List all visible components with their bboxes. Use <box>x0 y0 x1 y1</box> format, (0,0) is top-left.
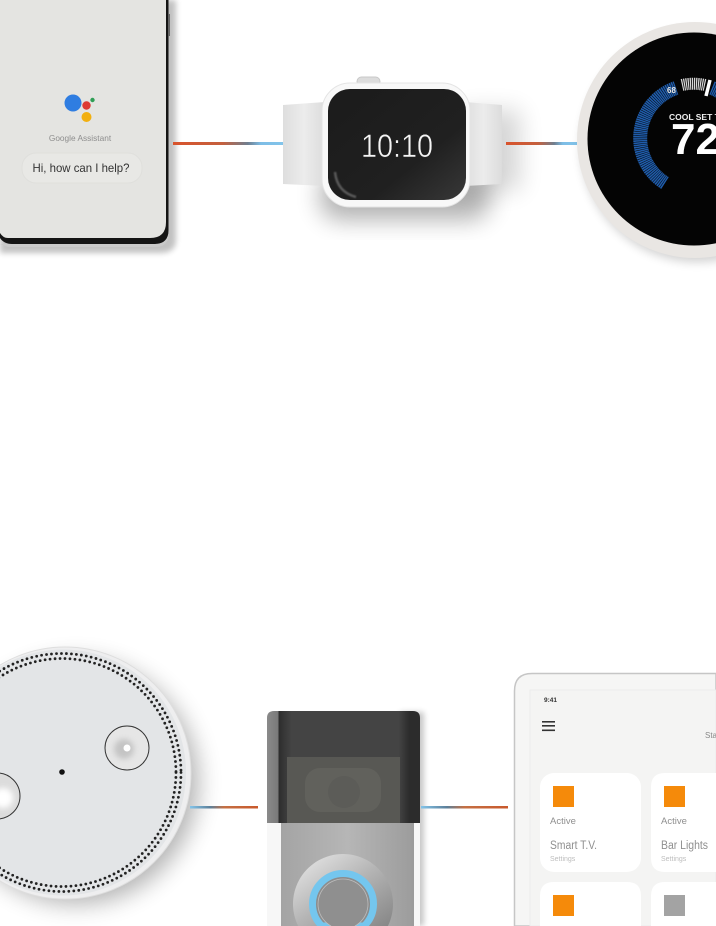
card: Bar Lights <box>651 773 716 872</box>
speech bubble: Hi, how can I help? <box>32 161 130 175</box>
watch bands <box>283 102 325 186</box>
left button <box>0 773 20 819</box>
doorbell body <box>267 711 420 926</box>
watch case <box>322 83 470 207</box>
card: Smart T.V.: Active <box>550 816 576 827</box>
tablet screen <box>530 690 716 926</box>
button disc <box>293 854 393 926</box>
connector: phone to watch <box>173 142 283 145</box>
device: smart speaker <box>0 647 198 904</box>
right button <box>105 726 149 770</box>
label: Google Assistant: Google Assistant <box>49 133 112 143</box>
phone body <box>0 0 168 244</box>
phone screen <box>0 0 166 238</box>
device: thermostat <box>577 22 716 262</box>
watch screen <box>328 89 466 200</box>
card: Smart T.V.: Smart T.V. <box>550 840 597 852</box>
speaker top <box>0 647 191 899</box>
card: Smart T.V.: Settings <box>550 856 576 863</box>
connector: doorbell to tablet <box>421 806 508 808</box>
card: Bar Lights: Settings <box>661 856 687 863</box>
blue temperature arc <box>640 88 676 183</box>
device: smartphone with Google Assistant <box>0 0 176 253</box>
card: Bar Lights: Bar Lights <box>661 840 708 852</box>
device: tablet app <box>514 674 716 926</box>
microphone hole <box>59 769 65 775</box>
card: inactive device <box>651 882 716 926</box>
device: video doorbell <box>267 711 424 926</box>
watch time: 10:10 <box>361 128 433 164</box>
doorbell dark top <box>267 711 420 823</box>
speaker perforations <box>0 654 181 892</box>
watch crown <box>357 77 380 86</box>
status bar time: 9:41 <box>544 697 557 704</box>
white tick arc <box>682 84 705 85</box>
speech bubble <box>22 153 142 183</box>
tablet frame <box>514 674 716 926</box>
thermostat bezel <box>577 22 716 258</box>
card: Bar Lights: Active <box>661 816 687 827</box>
blue light ring <box>312 873 374 926</box>
set point marker <box>706 80 710 96</box>
card: Smart T.V. <box>540 773 641 872</box>
doorbell silver face <box>281 823 414 926</box>
device: smartwatch <box>283 77 520 220</box>
icon: menu <box>542 721 555 731</box>
card: active device <box>540 882 641 926</box>
icon: Google Assistant dots <box>64 94 95 122</box>
current temperature: 68 <box>667 86 676 95</box>
connector: watch to thermostat <box>506 142 577 145</box>
connector: speaker to doorbell <box>190 806 258 808</box>
camera window <box>287 757 400 823</box>
thermostat face <box>588 32 716 246</box>
